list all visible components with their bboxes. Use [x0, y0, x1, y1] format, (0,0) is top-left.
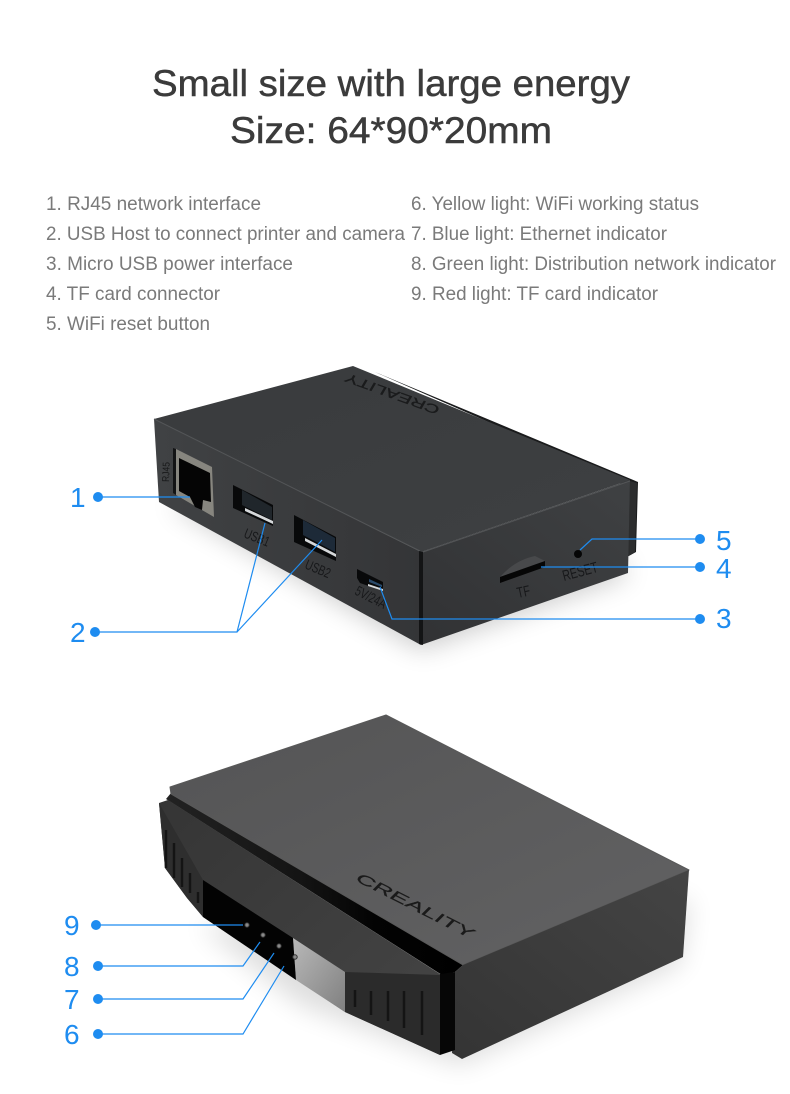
- callout 5: 5: [716, 525, 732, 556]
- feature list: lights: 8. Green light: Distribution network indicator: [411, 254, 777, 275]
- black side strip: [440, 972, 455, 1055]
- callout 8: [64, 942, 260, 982]
- feature list: ports: 1. RJ45 network interface: [46, 194, 261, 215]
- feature list: ports: 3. Micro USB power interface: [46, 254, 293, 275]
- callout 6: [64, 966, 284, 1050]
- callout 3: [380, 587, 732, 634]
- callout 1: 1: [70, 482, 86, 513]
- LED indicators: [245, 923, 297, 959]
- slot: TF card: TF: [515, 582, 532, 601]
- right vent panel: [345, 972, 440, 1055]
- callout 3: 3: [716, 603, 732, 634]
- port: micro USB: [352, 569, 390, 612]
- vents: [166, 830, 422, 1035]
- port: USB1: USB1: [242, 525, 272, 550]
- LED window: [203, 880, 296, 980]
- feature list: lights: 7. Blue light: Ethernet indicator: [411, 224, 668, 245]
- logo: top: CREALITY: [341, 371, 443, 417]
- logo: front: CREALITY: [351, 871, 479, 942]
- front face: [154, 419, 421, 645]
- port: USB1: [233, 485, 273, 550]
- callout 7: [64, 953, 274, 1015]
- port: USB2: [294, 515, 336, 582]
- port: micro USB: 5V/24A: [352, 583, 390, 612]
- top face: [154, 366, 630, 552]
- callout 5: [580, 525, 732, 556]
- silver plate: [293, 938, 345, 1012]
- feature list: lights: 6. Yellow light: WiFi working status: [411, 194, 699, 215]
- callout 2: 2: [70, 617, 86, 648]
- feature list: ports: 4. TF card connector: [46, 284, 221, 305]
- top face: [170, 715, 689, 965]
- right face: [421, 480, 630, 645]
- feature list: ports: [46, 194, 405, 335]
- rear black strip: [375, 372, 638, 557]
- title: Size: 64*90*20mm: [230, 110, 552, 151]
- callout 4: [541, 553, 732, 584]
- callout 7: 7: [64, 984, 80, 1015]
- callout 6: 6: [64, 1019, 80, 1050]
- right face: [452, 870, 689, 1059]
- feature list: ports: 5. WiFi reset button: [46, 314, 210, 335]
- device photo: ports side: [154, 366, 638, 650]
- callout 9: [64, 910, 243, 941]
- callout 1: [70, 482, 190, 513]
- title: Small size with large energy: [152, 63, 631, 104]
- title: [152, 63, 631, 151]
- callout 9: 9: [64, 910, 80, 941]
- callout 4: 4: [716, 553, 732, 584]
- black gap strip: [166, 793, 463, 975]
- left vent panel: [159, 803, 203, 917]
- feature list: lights: [411, 194, 777, 305]
- callout 8: 8: [64, 951, 80, 982]
- button: reset: RESET: [560, 558, 600, 584]
- port: RJ45: RJ45: [160, 462, 172, 482]
- feature list: lights: 9. Red light: TF card indicator: [411, 284, 659, 305]
- feature list: ports: 2. USB Host to connect printer and camera: [46, 224, 405, 245]
- front panel: [159, 800, 440, 1055]
- callout 2: [70, 523, 322, 648]
- device photo: lights side: [159, 715, 690, 1065]
- port: RJ45: [160, 448, 214, 517]
- slot: TF card: [500, 556, 545, 601]
- port: USB2: USB2: [303, 556, 333, 582]
